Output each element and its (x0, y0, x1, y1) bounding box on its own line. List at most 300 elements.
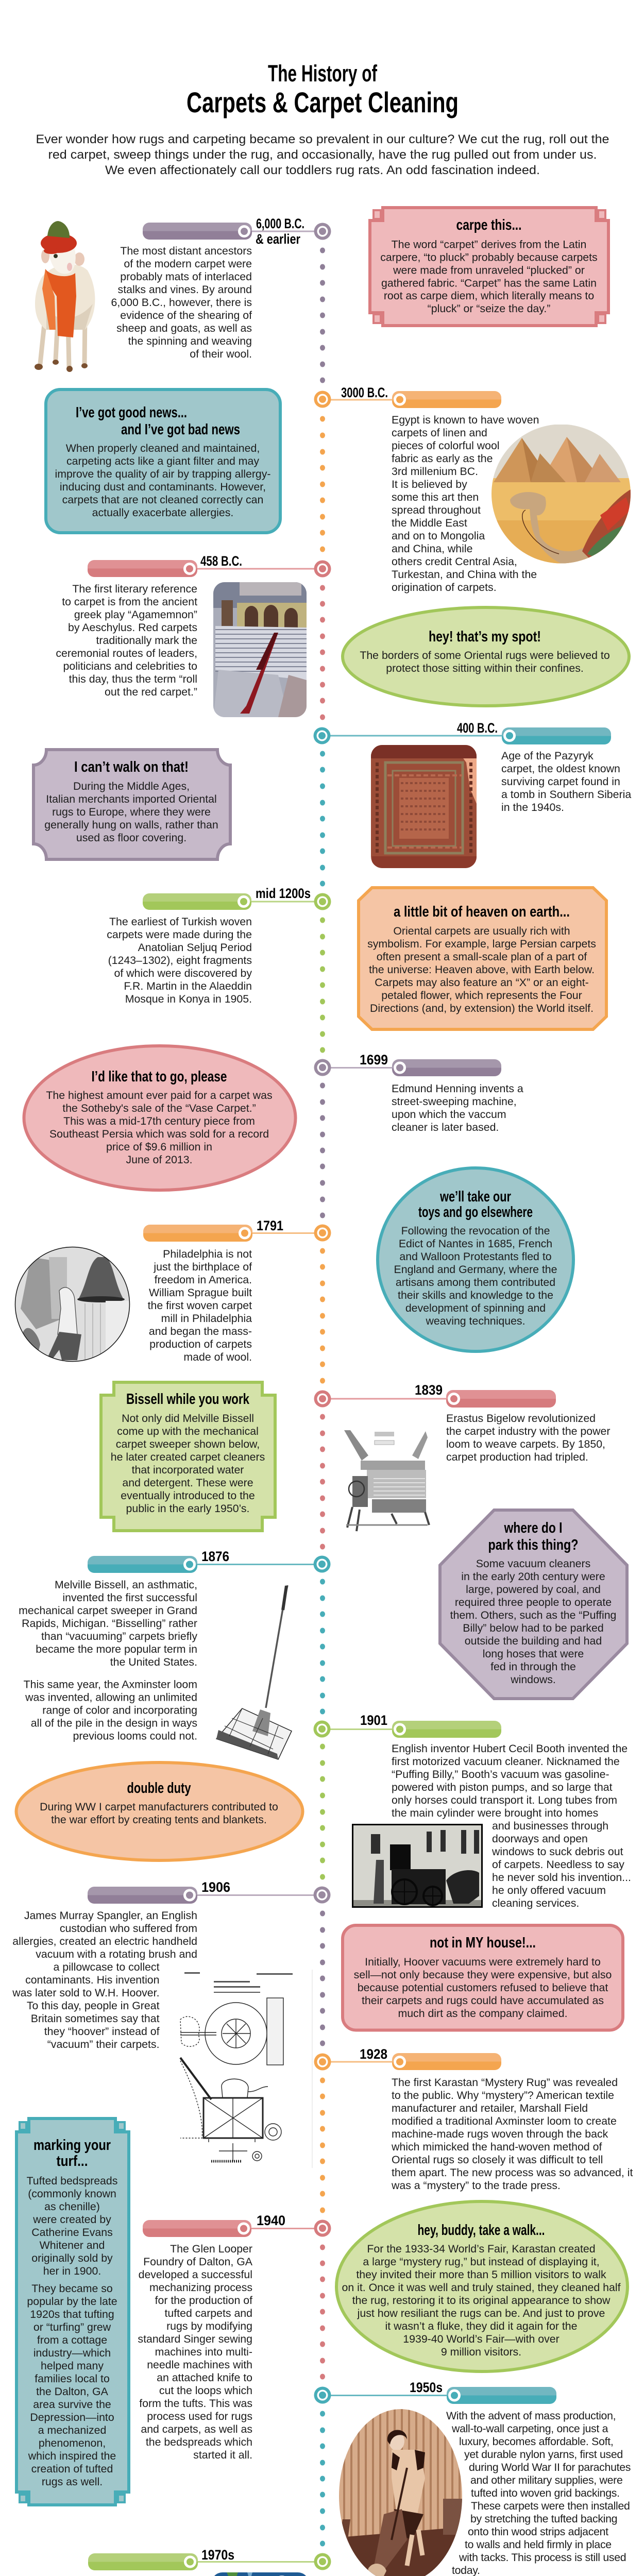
body text: Whitener and (40, 2239, 105, 2251)
text: Melville Bissell: previous looms could not. (73, 1730, 197, 1742)
text: Glen Looper Foundry: for the production of (155, 2294, 252, 2307)
body text: just how resiliant the rugs can be. And just to prove (357, 2307, 605, 2319)
text: earliest carpets: sheep and goats, as well as (116, 322, 252, 334)
body text: improve the quality of air by trapping allergy- (55, 468, 271, 480)
timeline marker: 1906: 1906 (201, 1879, 230, 1895)
timeline dots: 1876 to 1901 (320, 1579, 325, 1715)
text: first literary reference: greek play “Agamemnon” (74, 608, 197, 621)
text: Hubert Cecil Booth: windows to suck debris out (492, 1845, 623, 1858)
text: Glen Looper Foundry: form the tufts. This was (139, 2397, 252, 2410)
panel: good news bad news (46, 389, 280, 533)
text: Hubert Cecil Booth: cleaning services. (492, 1897, 579, 1909)
timeline marker: 1839 (314, 1382, 556, 1408)
body text: industry—which (33, 2347, 111, 2359)
text: 1950s wall-to-wall carpeting: With the advent of mass production, (446, 2410, 616, 2422)
heading: where do I (504, 1520, 563, 1536)
body text: protect those sitting within their confines. (386, 662, 584, 674)
image: power loom engraving (344, 1430, 429, 1531)
text: Pazyryk: surviving carpet found in (501, 775, 620, 788)
text: 1950s wall-to-wall carpeting: to walls and held firmly in place (465, 2538, 612, 2551)
timeline dots: 1950s to 1970s (320, 2411, 325, 2546)
body text: originally sold by (31, 2252, 113, 2264)
text: Hubert Cecil Booth: he only offered vacuum (492, 1884, 606, 1896)
text: James Murray Spangler: a pillowcase to collect (54, 1961, 160, 1973)
text: Karastan Mystery Rug: manufacturer and retailer, Marshall Field (392, 2102, 588, 2114)
body text: During WW I carpet manufacturers contributed to (40, 1801, 278, 1813)
body text: 1939-40 World’s Fair—with over (403, 2333, 560, 2345)
heading (76, 404, 240, 438)
timeline marker: 458 B.C.: 458 B.C. (200, 553, 242, 569)
text: Glen Looper Foundry: an attached knife to (157, 2371, 252, 2384)
body text: windows. (510, 1673, 556, 1686)
timeline marker: 1791: 1791 (257, 1218, 283, 1233)
timeline marker: 1928 (314, 2046, 501, 2070)
body text: their carpets and rugs could have accumulated as (362, 1994, 604, 2007)
text: Pazyryk: in the 1940s. (501, 801, 564, 814)
timeline marker: 1950s: 1950s (410, 2380, 443, 2395)
body text: or “turfing” grew (33, 2321, 111, 2333)
text: Philadelphia: mill in Philadelphia (161, 1312, 252, 1325)
panel: I can't walk on that (33, 750, 230, 859)
body text: carpere, “to pluck” probably because carpets (380, 251, 598, 264)
text: Karastan Mystery Rug: them apart. The new process was so advanced, it (392, 2166, 633, 2179)
body text: and Walloon Protestants fled to (399, 1250, 552, 1263)
text: Glen Looper Foundry: machines into multi- (155, 2346, 252, 2358)
text: first literary reference: to carpet is from the ancient (62, 596, 197, 608)
body text: Edict of Nantes in 1685, French (399, 1238, 552, 1250)
body text: For the 1933-34 World’s Fair, Karastan created (367, 2243, 596, 2255)
body text: phenomenon, (39, 2437, 106, 2449)
text: Karastan Mystery Rug: to the public. Why “mystery”? American textile (392, 2089, 614, 2102)
text: Melville Bissell: was invented, allowing an unlimited (25, 1691, 197, 1703)
body text: the Sotheby's sale of the “Vase Carpet.” (62, 1102, 256, 1114)
text: first literary reference: this day, thus the term “roll (69, 673, 197, 685)
text: Karastan Mystery Rug: modified a traditional Axminster loom to create (392, 2115, 617, 2127)
text: Turkish carpets: of which were discovered by (114, 967, 252, 979)
body text: Catherine Evans (31, 2226, 113, 2239)
text: Melville Bissell: the United States. (110, 1656, 197, 1668)
text: Hubert Cecil Booth: only horses could transport it. Long tubes from (392, 1794, 617, 1806)
body text: weaving techniques. (426, 1315, 525, 1327)
body text: The borders of some Oriental rugs were believed to (360, 649, 610, 662)
timeline dots: 400 BC to mid 1200s (320, 751, 325, 886)
text: Karastan Mystery Rug: Oriental rugs so closely it was difficult to tell (392, 2154, 603, 2166)
text: Glen Looper Foundry: Foundry of Dalton, GA (143, 2256, 253, 2268)
text: Glen Looper Foundry: started it all. (193, 2449, 252, 2461)
text: earliest carpets: the spinning and weaving (128, 335, 252, 347)
image: Pazyryk carpet (371, 745, 477, 868)
timeline dots: 1928 to 1940 (320, 2077, 325, 2213)
heading: turf... (57, 2153, 88, 2170)
body text: rugs to Europe, where they were (52, 806, 211, 818)
text: James Murray Spangler: “vacuum” their carpets. (47, 2038, 160, 2050)
body text: They became so (31, 2282, 113, 2295)
body text: fed in through the (490, 1660, 576, 1673)
timeline dots: 1906 to 1928 (320, 1910, 325, 2046)
timeline dots: 6000 BC to 3000 BC (320, 247, 325, 383)
heading: hey! that’s my spot! (429, 629, 541, 645)
timeline marker: 1970s: 1970s (201, 2547, 234, 2563)
panel: where do I park this thing (440, 1510, 627, 1699)
timeline marker: 1791 (143, 1218, 331, 1242)
text: Egypt: the Middle East (392, 517, 467, 529)
text: earliest carpets: evidence of the shearing of (120, 309, 252, 321)
intro text: We even affectionately call our toddlers rug rats. An odd fascination indeed. (105, 163, 540, 177)
body text: sell—not only because they were expensive, but also (354, 1969, 612, 1981)
body text: “pluck” or “seize the day.” (428, 302, 550, 315)
body text: gathered fabric. “Carpet” has the same Latin (381, 277, 597, 290)
text: Philadelphia: made of wool. (183, 1351, 252, 1363)
text: Glen Looper Foundry: The Glen Looper (170, 2243, 252, 2255)
text: Hubert Cecil Booth: and businesses through (492, 1820, 608, 1832)
body text: eventually introduced to the (121, 1489, 255, 1502)
body text: The word “carpet” derives from the Latin (392, 238, 586, 250)
heading: Bissell while you work (126, 1391, 250, 1408)
image: Puffing Billy horse-drawn vacuum (352, 1824, 483, 1908)
text: earliest carpets: stalks and vines. By around (118, 283, 252, 296)
text: James Murray Spangler: they “hoover” instead of (44, 2025, 160, 2038)
text: Turkish carpets: F.R. Martin in the Alaeddin (124, 980, 252, 992)
text: first literary reference: politicians and celebrities to (63, 660, 197, 672)
text: Melville Bissell: all of the pile in the design in ways (31, 1717, 197, 1729)
image: 1950s woman vacuuming (339, 2409, 463, 2576)
text: Karastan Mystery Rug: machine-made rugs woven through the back (392, 2128, 608, 2140)
text: first literary reference: ceremonial routes of leaders, (56, 647, 197, 659)
body text: a mechanized (38, 2424, 106, 2436)
body text: and detergent. These were (122, 1477, 253, 1489)
text: Egypt: and on to Mongolia (392, 530, 485, 542)
text: earliest carpets: of the modern carpet were (124, 258, 252, 270)
image: pyramids and camel (492, 425, 631, 567)
text: Erastus Bigelow: the carpet industry with the power (446, 1425, 610, 1437)
text: Pazyryk: carpet, the oldest known (501, 762, 620, 775)
timeline marker: 1906 (88, 1879, 331, 1904)
body text: During the Middle Ages, (73, 780, 190, 792)
title: Carpets & Carpet Cleaning (187, 86, 459, 118)
body text: Carpets may also feature an “X” or an eight- (375, 976, 589, 989)
text: Erastus Bigelow: Erastus Bigelow revolutionized (446, 1412, 596, 1425)
intro text (36, 132, 609, 177)
body text: they invited their more than 5 million visitors to walk (356, 2268, 606, 2281)
body text: Southeast Persia which was sold for a record (49, 1128, 269, 1140)
heading: not in MY house!... (430, 1935, 536, 1951)
body text: in the early 20th century were (461, 1570, 605, 1583)
text: James Murray Spangler: James Murray Spangler, an English (24, 1909, 197, 1922)
text: Melville Bissell: This same year, the Axminster loom (24, 1679, 197, 1691)
intro text: Ever wonder how rugs and carpeting became so prevalent in our culture? We cut the rug, roll out the (36, 132, 609, 146)
text: James Murray Spangler: allergies, created an electric handheld (12, 1935, 197, 1947)
text: Philadelphia: the first woven carpet (148, 1299, 252, 1312)
timeline marker: 1876 (88, 1549, 331, 1573)
body text: often present a small-scale plan of a part of (377, 951, 587, 963)
body text: Tufted bedspreads (27, 2175, 117, 2187)
body text: the rug, restoring it to its original appearance to show (352, 2294, 611, 2307)
body text: popular by the late (27, 2295, 117, 2308)
text: Melville Bissell: mechanical carpet sweeper in Grand (19, 1604, 197, 1617)
text: earliest carpets: The most distant ancestors (120, 245, 252, 257)
text: Pazyryk: Age of the Pazyryk (501, 750, 594, 762)
timeline marker: 6,000 B.C. and earlier: 6,000 B.C. (256, 216, 304, 231)
heading: carpe this... (456, 217, 521, 233)
image: 1970s disco room with pink shag (211, 2572, 309, 2576)
heading: toys and go elsewhere (418, 1204, 533, 1221)
text: Philadelphia: William Sprague built (149, 1286, 252, 1299)
text: Edmund Henning: cleaner is later based. (392, 1121, 499, 1133)
text: James Murray Spangler: To this day, people in Great (27, 1999, 160, 2012)
text: Glen Looper Foundry: rugs by modifying (166, 2320, 252, 2332)
body text: Directions (and, by extension) the World itself. (370, 1002, 594, 1014)
timeline marker: 1699 (314, 1052, 501, 1076)
timeline marker: 1970s (88, 2547, 331, 2570)
panel: hey that's my spot (343, 607, 629, 706)
image: red carpet on stairs (213, 582, 307, 717)
timeline marker: 3000 B.C.: 3000 B.C. (341, 385, 388, 400)
body text: the Dalton, GA (36, 2385, 109, 2398)
text: Egypt: Turkestan, and China with the (392, 568, 537, 581)
timeline marker: 400 B.C. (313, 720, 611, 744)
text: Hubert Cecil Booth: he never sold his invention... (492, 1871, 631, 1884)
body text: as chenille) (44, 2200, 100, 2213)
panel: toys and go elsewhere (378, 1168, 573, 1351)
timeline marker: 1950s (314, 2380, 556, 2404)
body text: generally hung on walls, rather than (44, 819, 218, 831)
timeline marker: 1839: 1839 (415, 1382, 443, 1398)
body text: symbolism. For example, large Persian carpets (367, 938, 596, 950)
text: Egypt: It is believed by (392, 478, 467, 490)
heading: we’ll take our (439, 1189, 511, 1205)
panel: not in MY house (343, 1925, 623, 2030)
panel: double duty (16, 1762, 303, 1860)
body text: her in 1900. (43, 2265, 101, 2277)
text: Melville Bissell: range of color and incorporating (42, 1704, 197, 1717)
body text: When properly cleaned and maintained, (66, 442, 260, 454)
body text: outside the building and had (465, 1635, 602, 1647)
timeline marker: 1699: 1699 (360, 1052, 388, 1067)
text: Hubert Cecil Booth: the main cylinder were brought into homes (392, 1807, 598, 1819)
timeline dots: mid 1200s to 1699 (320, 917, 325, 1053)
text: 1950s wall-to-wall carpeting: wall-to-wall carpeting, once just a (451, 2422, 608, 2435)
body text: it wasn’t a fluke, they did it again for the (385, 2320, 577, 2332)
text: Turkish carpets: Anatolian Seljuq Period (138, 941, 252, 954)
timeline marker: 400 B.C.: 400 B.C. (457, 720, 498, 736)
body text: required three people to operate (455, 1596, 612, 1608)
body text: root as carpe diem, which literally means to (384, 290, 594, 302)
body text: England and Germany, where the (394, 1263, 557, 1276)
text: Glen Looper Foundry: developed a successful (139, 2268, 252, 2281)
text: James Murray Spangler: was later sold to W.H. Hoover. (12, 1987, 160, 1999)
body text: much dirt as the company claimed. (398, 2007, 568, 2020)
body text: he later created carpet cleaners (111, 1451, 265, 1463)
body text: price of $9.6 million in (106, 1141, 212, 1153)
body text: This was a mid-17th century piece from (63, 1115, 255, 1127)
text: Egypt: 3rd millenium BC. (392, 465, 478, 478)
panel: carpe this (370, 208, 608, 326)
panel: marking your turf (16, 2119, 129, 2505)
heading: and I’ve got bad news (121, 421, 240, 438)
timeline marker: 1901: 1901 (360, 1713, 387, 1728)
text: 1950s wall-to-wall carpeting: with tacks. This process is still used (459, 2551, 626, 2564)
text: earliest carpets: of their wool. (190, 348, 252, 360)
text: James Murray Spangler: contaminants. His invention (25, 1974, 160, 1986)
heading: hey, buddy, take a walk... (417, 2222, 545, 2239)
icon: sheep wearing hat and scarf (35, 221, 95, 372)
body text: Oriental carpets are usually rich with (393, 925, 570, 937)
text: 1950s wall-to-wall carpeting: onto thin wood strips adjacent (468, 2526, 608, 2538)
timeline marker: 1940: 1940 (257, 2213, 285, 2228)
heading: I can’t walk on that! (74, 759, 189, 775)
body text: were made from unraveled “plucked” or (393, 264, 585, 276)
text: Turkish carpets: Mosque in Konya in 1905. (125, 993, 252, 1005)
body text: the war effort by creating tents and blankets. (51, 1814, 267, 1826)
heading: I’ve got good news... (76, 404, 187, 421)
body text: 9 million visitors. (441, 2346, 521, 2358)
text: first literary reference: by Aeschylus. Red carpets (68, 621, 197, 634)
body text: rugs as well. (42, 2476, 103, 2488)
body text: Italian merchants imported Oriental (46, 793, 217, 805)
body text: Some vacuum cleaners (476, 1557, 590, 1570)
text: James Murray Spangler: custodian who suffered from (60, 1922, 197, 1935)
text: Karastan Mystery Rug: which mimicked the hand-woven method of (391, 2141, 602, 2153)
text: Glen Looper Foundry: standard Singer sewing (138, 2333, 252, 2345)
text: James Murray Spangler: Britain sometimes say that (31, 2012, 160, 2025)
text: Melville Bissell: Rapids, Michigan. “Bisselling” rather (22, 1617, 197, 1630)
body text: area survive the (33, 2398, 111, 2411)
heading: a little bit of heaven on earth... (394, 904, 570, 920)
text: Philadelphia: freedom in America. (155, 1274, 252, 1286)
text: earliest carpets: probably mats of interlaced (120, 270, 252, 283)
body text: because potential customers refused to believe that (358, 1981, 608, 1994)
text: Karastan Mystery Rug: The first Karastan “Mystery Rug” was revealed (392, 2076, 618, 2089)
text: Glen Looper Foundry: and carpets, as well as (141, 2423, 252, 2435)
timeline marker: 6,000 B.C. and earlier: & earlier (256, 231, 300, 247)
text: Egypt: some this art then (392, 491, 479, 503)
timeline dots: 1940 to 1950s (320, 2244, 325, 2379)
title (187, 60, 459, 118)
heading: park this thing? (488, 1537, 578, 1553)
body text: Following the revocation of the (401, 1225, 550, 1237)
text: Karastan Mystery Rug: was a “mystery” to the trade press. (391, 2179, 561, 2192)
text: Philadelphia: and began the mass- (149, 1325, 252, 1337)
text: 1950s wall-to-wall carpeting: and other military supplies, were (470, 2474, 622, 2486)
text: Melville Bissell: became the more popular term in (36, 1643, 197, 1655)
body text: them. Others, such as the “Puffing (450, 1609, 616, 1621)
heading (33, 2137, 111, 2170)
icon: carpet sweeper (216, 1585, 292, 1759)
text: Hubert Cecil Booth: powered with piston pumps, and so large that (392, 1781, 613, 1793)
text: first literary reference: traditionally mark the (96, 634, 197, 647)
heading: marking your (33, 2137, 111, 2154)
panel: heaven on earth (359, 888, 606, 1029)
text: Erastus Bigelow: carpet production had tripled. (446, 1451, 588, 1463)
body text: a large “mystery rug,” but instead of displaying it, (363, 2256, 600, 2268)
text: 1950s wall-to-wall carpeting: These carpets were then installed (471, 2500, 630, 2512)
intro text: red carpet, sweep things under the rug, and occasionally, have the rug pulled out from under us. (48, 148, 597, 162)
panel: I'd like that to go (24, 1046, 296, 1190)
body text: helped many (41, 2360, 104, 2372)
timeline dots: 1791 to 1839 (320, 1248, 325, 1384)
body text: (commonly known (28, 2188, 116, 2200)
text: 1950s wall-to-wall carpeting: luxury, becomes affordable. Soft, (459, 2435, 613, 2448)
body text: actually exacerbate allergies. (92, 506, 233, 519)
text: Egypt: Egypt is known to have woven (392, 414, 539, 426)
body text: come up with the mechanical (117, 1425, 259, 1437)
text: Turkish carpets: The earliest of Turkish woven (109, 916, 252, 928)
text: Melville Bissell: Melville Bissell, an asthmatic, (55, 1579, 197, 1591)
text: first literary reference: out the red carpet.” (105, 686, 197, 698)
text: 1950s wall-to-wall carpeting: yet durable nylon yarns, first used (464, 2448, 623, 2461)
image: Liberty Bell engraving (15, 1247, 131, 1363)
text: Egypt: spread throughout (392, 504, 481, 516)
text: Egypt: carpets of linen and (392, 427, 487, 439)
timeline marker: 1901 (313, 1713, 501, 1738)
text: Egypt: and China, while (392, 543, 472, 555)
body text: Billy” below had to be parked (463, 1622, 604, 1634)
text: Hubert Cecil Booth: “Puffing Billy,” Booth’s vacuum was gasoline- (392, 1768, 609, 1781)
body text: which inspired the (28, 2450, 116, 2462)
text: Glen Looper Foundry: mechanizing process (149, 2281, 252, 2294)
body text: June of 2013. (126, 1154, 193, 1166)
timeline dots: 3000 BC to 458 BC (320, 416, 325, 552)
body text: inducing dust and contaminants. However, (60, 481, 266, 493)
body text: petaled flower, which represents the Four (381, 989, 582, 1002)
text: Egypt: others credit Central Asia, (392, 555, 517, 568)
body text: public in the early 1950’s. (126, 1502, 249, 1515)
text: James Murray Spangler: vacuum with a rotating brush and (36, 1948, 197, 1960)
body text: creation of tufted (31, 2463, 113, 2475)
body text: Depression—into (30, 2411, 114, 2424)
body text: carpets that are not cleaned correctly can (62, 494, 263, 506)
text: Glen Looper Foundry: tufted carpets and (165, 2307, 252, 2319)
text: Egypt: pieces of colorful wool (392, 439, 500, 452)
body text: long hoses that were (483, 1648, 584, 1660)
timeline marker: 1940 (143, 2213, 331, 2237)
text: earliest carpets: 6,000 B.C., however, there is (111, 296, 252, 309)
text: Turkish carpets: carpets were made during the (107, 928, 252, 941)
text: Hubert Cecil Booth: first motorized vacuum cleaner. Nicknamed the (392, 1755, 620, 1768)
text: Melville Bissell: than “vacuuming” carpets briefly (41, 1630, 197, 1642)
text: Edmund Henning: Edmund Henning invents a (392, 1082, 523, 1095)
body text: development of spinning and (405, 1302, 546, 1314)
text: Glen Looper Foundry: cut the loops which (159, 2384, 252, 2397)
image: Spangler patent drawing (180, 1970, 312, 2168)
body text: the universe: Heaven above, with Earth below. (369, 963, 595, 976)
body text: families local to (35, 2372, 110, 2385)
text: 1950s wall-to-wall carpeting: by stretching the tufted backing (470, 2513, 617, 2525)
body text: were created by (32, 2213, 111, 2226)
body text: 1920s that tufting (30, 2308, 114, 2320)
text: Hubert Cecil Booth: English inventor Hubert Cecil Booth invented the (392, 1742, 628, 1755)
timeline marker: mid 1200s (143, 886, 331, 910)
body text: carpet sweeper shown below, (116, 1438, 260, 1450)
body text: artisans among them contributed (396, 1276, 555, 1289)
text: Hubert Cecil Booth: of carpets. Needless to say (492, 1858, 624, 1871)
body text: their skills and knowledge to the (398, 1289, 553, 1301)
heading (488, 1520, 578, 1553)
body text: large, powered by coal, and (466, 1583, 601, 1596)
panel: hey buddy take a walk (336, 2201, 628, 2371)
text: Pazyryk: a tomb in Southern Siberia (501, 788, 631, 801)
text: Hubert Cecil Booth: doorways and open (492, 1833, 588, 1845)
body text: The highest amount ever paid for a carpet was (46, 1089, 273, 1101)
body text: carpeting acts like a giant filter and may (66, 455, 259, 467)
timeline dots: 458 BC to 400 BC (320, 585, 325, 720)
text: first literary reference: The first literary reference (72, 583, 197, 595)
body text: on it. Once it was well and truly stained, they cleaned half (342, 2281, 621, 2294)
body text: from a cottage (37, 2334, 107, 2346)
timeline marker: mid 1200s: mid 1200s (256, 886, 311, 901)
text: Edmund Henning: upon which the vaccum (392, 1108, 506, 1121)
timeline dots: 1901 to 1906 (320, 1743, 325, 1879)
